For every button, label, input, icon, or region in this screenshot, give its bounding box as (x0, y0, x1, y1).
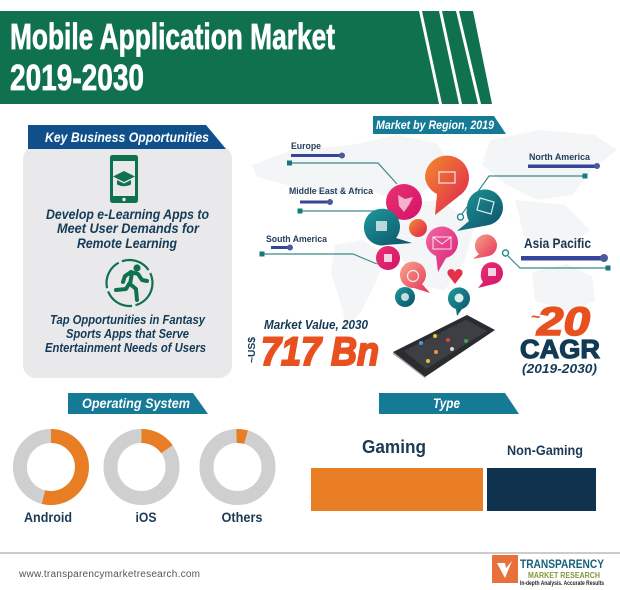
region heading: Market by Region, 2019 (376, 118, 494, 132)
bubble: pink butterfly (386, 184, 422, 220)
footer rule (0, 552, 620, 554)
bubble: pink circle icon (400, 262, 430, 293)
bar: Gaming (311, 437, 483, 511)
logo: TRANSPARENCY (520, 557, 604, 571)
CAGR callout (520, 300, 600, 376)
website url: www.transparencymarketresearch.com (18, 569, 200, 580)
operating system heading: Operating System (82, 396, 190, 411)
bubble: dark teal (364, 209, 412, 245)
panel heading (28, 125, 226, 149)
label: Europe (287, 141, 397, 184)
icon: phone with graduation cap (110, 155, 138, 203)
CAGR callout: CAGR (520, 334, 600, 364)
label: Europe: Europe (291, 141, 321, 152)
text: fantasy sports opportunity: Sports Apps that Serve (66, 327, 189, 341)
donut: iOS (110, 436, 172, 525)
bubble: teal laptop (457, 189, 503, 231)
label: Asia Pacific (502, 235, 610, 270)
label: South America: South America (266, 234, 328, 245)
title banner (0, 11, 492, 104)
type heading (379, 393, 519, 414)
donut: iOS: iOS (136, 509, 156, 525)
bubble: pink mail (426, 227, 458, 272)
label: Asia Pacific: Asia Pacific (524, 235, 591, 251)
donut: Others (206, 436, 268, 525)
bubble: pink cube (478, 262, 503, 288)
text: e-learning opportunity: Remote Learning (77, 236, 178, 251)
donut: Android: Android (24, 509, 72, 525)
title: Mobile Application Market (10, 16, 335, 57)
label: North America (458, 152, 600, 220)
type heading: Type (433, 396, 460, 411)
title: 2019-2030 (10, 57, 144, 98)
bubble: teal gear (395, 287, 415, 307)
label: Middle East & Africa (289, 186, 380, 214)
logo: MARKET RESEARCH (528, 571, 600, 580)
label: North America: North America (529, 152, 591, 163)
market value callout (246, 318, 379, 374)
CAGR callout: 20 (536, 300, 590, 344)
bar: Non-Gaming (487, 443, 596, 511)
CAGR callout: (2019-2030) (522, 361, 597, 376)
bubble: heart (447, 269, 463, 284)
donut: Android (20, 436, 82, 525)
bubble: pink house (376, 246, 400, 270)
label: Middle East & Africa: Middle East & Africa (289, 186, 374, 197)
bubble: small red (409, 219, 427, 237)
world map background (252, 130, 617, 328)
bar: Non-Gaming: Non-Gaming (507, 443, 583, 458)
CAGR callout: ~ (531, 309, 540, 326)
text: fantasy sports opportunity: Entertainment Needs of Users (45, 341, 206, 355)
text: e-learning opportunity: Meet User Demands for (57, 221, 200, 236)
market value callout: ~US$ (246, 337, 258, 363)
label: South America (260, 234, 377, 264)
bubble: peach (473, 234, 497, 259)
market value callout: Market Value, 2030 (264, 318, 368, 332)
operating system heading (68, 393, 208, 414)
panel: key business opportunities (23, 125, 232, 378)
logo (492, 555, 605, 587)
text: fantasy sports opportunity: Tap Opportunities in Fantasy (50, 313, 206, 327)
text: e-learning opportunity: Develop e-Learning Apps to (46, 207, 209, 222)
bubble: orange chat (425, 156, 469, 215)
market value callout: 717 Bn (261, 330, 379, 374)
logo: In-depth Analysis. Accurate Results (520, 581, 605, 587)
smartphone illustration (393, 315, 495, 379)
bar: Gaming: Gaming (362, 437, 426, 457)
panel heading: Key Business Opportunities (45, 130, 209, 145)
donut: Others: Others (222, 509, 263, 525)
app icon bubbles (364, 156, 503, 316)
icon: running figure in ring (106, 260, 152, 306)
bubble: teal chat (448, 287, 470, 316)
